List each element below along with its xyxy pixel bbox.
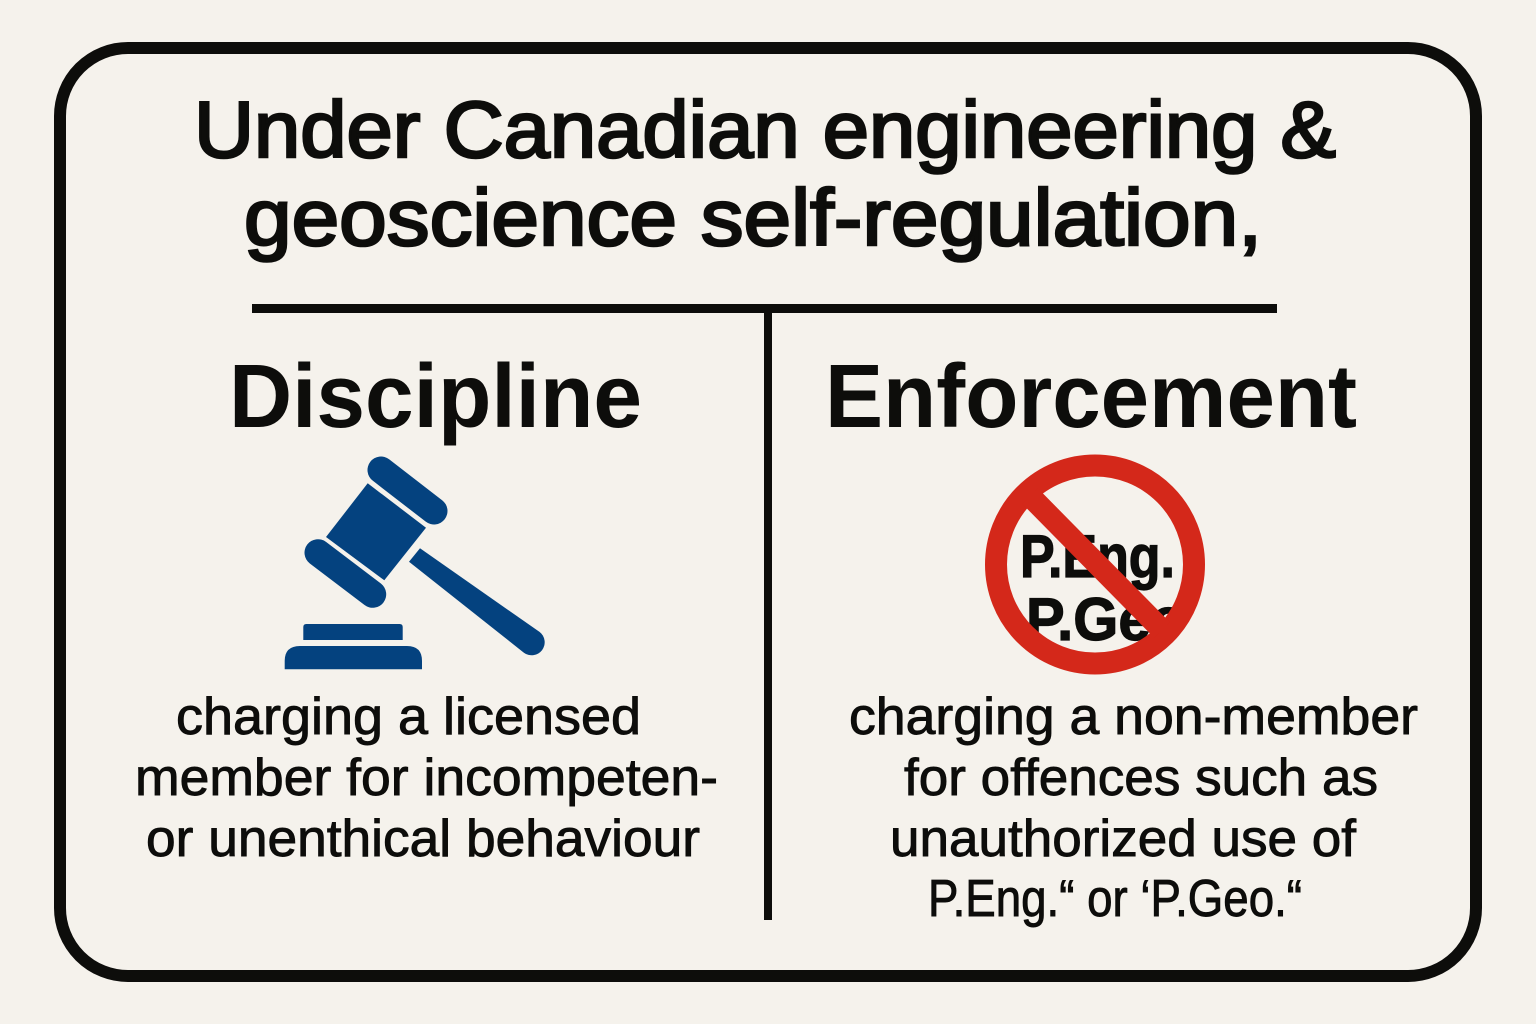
text: enforcement description: for offences such as bbox=[904, 749, 1378, 807]
text: discipline description bbox=[135, 688, 718, 868]
panel: discipline bbox=[135, 347, 718, 868]
heading: Enforcement: Enforcement bbox=[825, 347, 1357, 447]
title: geoscience self-regulation, bbox=[244, 173, 1262, 262]
icon: prohibited P.Eng. and P.Geo. designations bbox=[996, 466, 1194, 664]
heading: Discipline: Discipline bbox=[229, 347, 642, 447]
panel: enforcement bbox=[825, 347, 1418, 928]
icon: prohibited P.Eng. and P.Geo. designations: P.Geo bbox=[1026, 586, 1186, 653]
text: discipline description: charging a licensed bbox=[176, 688, 641, 746]
text: discipline description: or unenthical behaviour bbox=[146, 810, 700, 868]
title: Under Canadian engineering & bbox=[194, 85, 1336, 174]
icon: prohibited P.Eng. and P.Geo. designations: P.Eng. bbox=[1020, 523, 1175, 590]
text: enforcement description: unauthorized use of bbox=[890, 810, 1357, 868]
text: discipline description: member for incompeten- bbox=[135, 749, 718, 807]
icon: gavel bbox=[285, 470, 545, 669]
text: enforcement description bbox=[849, 688, 1418, 928]
text: enforcement description: P.Eng.“ or ‘P.Geo.“ bbox=[928, 870, 1302, 928]
title bbox=[194, 85, 1336, 262]
text: enforcement description: charging a non-member bbox=[849, 688, 1418, 746]
